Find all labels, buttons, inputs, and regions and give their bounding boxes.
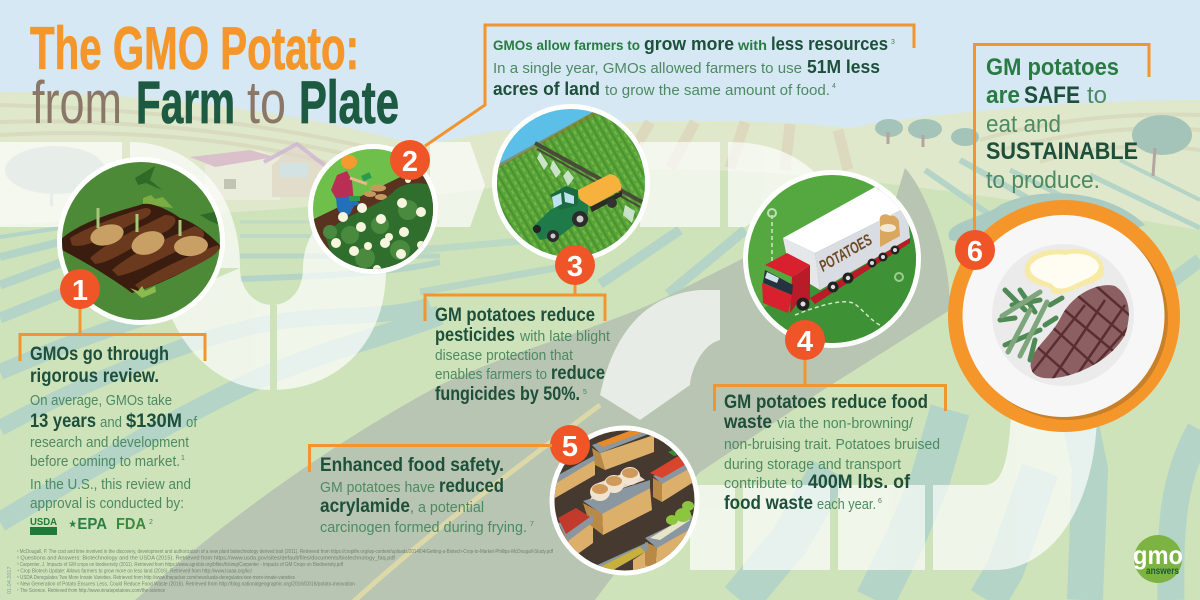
trees <box>875 115 1192 176</box>
text block 2: grow more with less resources: acres of land <box>493 79 600 99</box>
text block 3: reduce pesticides: with late blight <box>519 328 611 345</box>
text block 4: reduce food waste: 6 <box>878 498 882 505</box>
text block 1: rigorous review: before coming to market. <box>30 453 180 470</box>
agency logos: USDA <box>30 517 57 528</box>
badge 4 and connector <box>785 320 825 385</box>
text block 2: grow more with less resources: 3 <box>891 39 895 46</box>
steak <box>1030 285 1129 378</box>
badge 6 <box>955 230 995 270</box>
text block 4: reduce food waste: 400M lbs. of <box>808 472 911 493</box>
text block 6: safe and sustainable <box>986 54 1138 194</box>
picture 4: potato truck <box>740 170 930 350</box>
footnotes: ⁵ USDA Deregulates Two More Innate Varieties. Retrieved from http://www.thepacker.com/news/usda-deregulates-two-more-innate-varieties <box>17 575 295 581</box>
text block 5: food safety: 7 <box>530 521 534 528</box>
footnotes <box>17 549 554 594</box>
plate with steak, beans and mashed potato <box>948 200 1180 432</box>
text block 3: reduce pesticides: enables farmers to <box>435 366 547 383</box>
picture 4: potato truck: POTATOES <box>816 232 875 275</box>
text block 6: safe and sustainable: SAFE <box>1024 82 1080 109</box>
text block 4: reduce food waste: via the non-browning/ <box>777 415 914 432</box>
text block 2: grow more with less resources: less resources <box>771 34 888 54</box>
text block 1: rigorous review: approval is conducted by: <box>30 495 184 512</box>
text block 6: safe and sustainable: SUSTAINABLE <box>986 138 1138 165</box>
green beans <box>1000 290 1062 360</box>
text block 1: rigorous review <box>30 344 198 512</box>
badge 3 and connector <box>555 245 595 295</box>
bracket 5 <box>310 446 552 472</box>
footnotes: ⁴ Crop Biotech Update: Allows farmers to grow more on less land (2016). Retrieved from http://www.isaaa.org/kc/ <box>17 568 253 574</box>
connector 2 <box>425 25 914 146</box>
date stamp: 01.04.2017 <box>7 566 13 594</box>
bracket 1 <box>20 334 205 361</box>
text block 5: food safety: acrylamide <box>320 496 410 517</box>
picture 3: tractor spraying field <box>492 104 650 260</box>
agency logos: ⋆EPA <box>68 516 107 533</box>
text block 5: food safety: Enhanced food safety. <box>320 455 504 476</box>
mashed potato highlight <box>1030 254 1099 288</box>
title: from <box>32 69 122 136</box>
text block 4: reduce food waste: waste <box>723 412 772 433</box>
text block 1: rigorous review: 1 <box>181 455 185 462</box>
text block 1: rigorous review: 13 years <box>30 411 96 432</box>
text block 1: rigorous review: research and development <box>30 434 190 451</box>
text block 6: safe and sustainable: are <box>986 82 1020 109</box>
white translucent shapes <box>0 142 1097 570</box>
text block 6: safe and sustainable: to produce. <box>986 167 1100 194</box>
badge 1 and connector: 1 <box>72 275 88 307</box>
text block 6: safe and sustainable: GM potatoes <box>986 54 1119 81</box>
bracket 3 <box>425 295 605 321</box>
text block 2: grow more with less resources: 51M less <box>807 57 880 77</box>
badge 5: 5 <box>562 431 578 463</box>
title: to <box>247 69 286 136</box>
text block 4: reduce food waste: food waste <box>724 493 813 514</box>
text block 2: grow more with less resources: In a single year, GMOs allowed farmers to use <box>493 60 802 77</box>
text block 3: reduce pesticides: 5 <box>583 389 587 396</box>
bracket 4 <box>714 386 946 411</box>
mashed potato <box>1025 249 1104 294</box>
footnotes: ² Questions and Answers: Biotechnology and the USDA (2015). Retrieved from https://www.usda.gov/sites/default/files/documents/biotechnology_faq.pdf <box>17 556 396 562</box>
badge 4 and connector: 4 <box>797 326 813 358</box>
text block 3: reduce pesticides: reduce <box>551 363 605 384</box>
footnotes: ⁷ The Science. Retrieved from http://www.innatepotatoes.com/the-science <box>17 588 165 594</box>
text block 3: reduce pesticides: GM potatoes reduce <box>435 305 595 326</box>
text block 4: reduce food waste: GM potatoes reduce food <box>724 392 928 413</box>
badge 6: 6 <box>967 236 983 268</box>
text block 2: grow more with less resources: 4 <box>832 83 836 90</box>
logo: gmo answers: answers <box>1146 566 1179 577</box>
text block 1: rigorous review: rigorous review. <box>30 366 159 387</box>
picture 1: potatoes sprouting in soil <box>57 157 225 325</box>
text block 2: grow more with less resources: with <box>737 37 767 53</box>
text block 3: reduce pesticides: fungicides by 50%. <box>435 384 580 405</box>
text block 1: rigorous review: On average, GMOs take <box>30 392 172 409</box>
text block 4: reduce food waste <box>723 392 940 514</box>
text block 6: safe and sustainable: eat and <box>986 111 1061 138</box>
text block 2: grow more with less resources: to grow the same amount of food. <box>605 82 830 99</box>
badge 2: 2 <box>402 146 418 178</box>
text block 3: reduce pesticides: disease protection that <box>435 347 574 364</box>
text block 1: rigorous review: In the U.S., this review and <box>30 476 191 493</box>
logo: gmo answers <box>1133 535 1183 583</box>
house <box>190 144 328 200</box>
badge 3 and connector: 3 <box>567 251 583 283</box>
badge 2 <box>390 140 430 180</box>
logo: gmo answers: gmo <box>1133 540 1183 570</box>
text block 6: safe and sustainable: to <box>1087 82 1107 109</box>
badge 1 and connector <box>60 269 100 334</box>
agency logos <box>30 516 153 535</box>
text block 2: grow more with less resources: grow more <box>644 34 734 54</box>
text block 1: rigorous review: $130M <box>126 411 182 432</box>
title: Plate <box>299 69 399 136</box>
text block 4: reduce food waste: during storage and transport <box>724 456 902 473</box>
picture 2: farmer with potato plants <box>308 144 440 280</box>
footnotes: ³ Carpenter, J. Impacts of GM crops on biodiversity (2011). Retrieved from https://www.agrobio.org/bfiles/fckimg/Carpenter - Impacts of GM Crops on Biodiversity.pdf <box>17 562 344 568</box>
text block 1: rigorous review: and <box>100 414 122 431</box>
footnotes: ⁶ New Generation of Potato Ensures Less, Could Reduce Food Waste (2016). Retrieved from http://blog.nationalgeographic.org/2016/03/16/potato-innovation <box>17 582 355 588</box>
text block 5: food safety: GM potatoes have <box>320 479 435 496</box>
bracket 6 <box>974 44 1149 232</box>
picture 5: grocery store produce <box>550 425 700 576</box>
footnotes: ¹ McDougall, P. The cost and time involved in the discovery, development and authorization of a new plant biotechnology derived trait (2011). Retrieved from https://croplife.org/wp-content/uploads/2014/04/Getting-a-Biotech-Crop-to-Market-Phillips-McDougall-Study.pdf <box>17 549 554 555</box>
agency logos: 2 <box>149 519 153 526</box>
text block 5: food safety: , a potential <box>410 499 484 516</box>
title <box>30 15 399 136</box>
title: The GMO Potato: <box>30 15 359 82</box>
text block 1: rigorous review: GMOs go through <box>30 344 169 365</box>
text block 1: rigorous review: of <box>186 414 198 431</box>
badge 5 <box>550 425 590 465</box>
text block 5: food safety: reduced <box>439 476 504 497</box>
text block 3: reduce pesticides: pesticides <box>435 325 515 346</box>
text block 4: reduce food waste: each year. <box>817 496 876 513</box>
text block 2: grow more with less resources: GMOs allow farmers to <box>493 37 640 53</box>
text block 3: reduce pesticides <box>435 305 611 405</box>
text block 4: reduce food waste: non-bruising trait. Potatoes bruised <box>724 436 940 453</box>
text block 4: reduce food waste: contribute to <box>724 475 803 492</box>
text block 5: food safety <box>320 455 534 536</box>
text block 5: food safety: carcinogen formed during frying. <box>320 519 527 536</box>
agency logos: FDA <box>116 516 146 533</box>
title: Farm <box>136 69 235 136</box>
text block 2: grow more with less resources <box>493 34 895 99</box>
